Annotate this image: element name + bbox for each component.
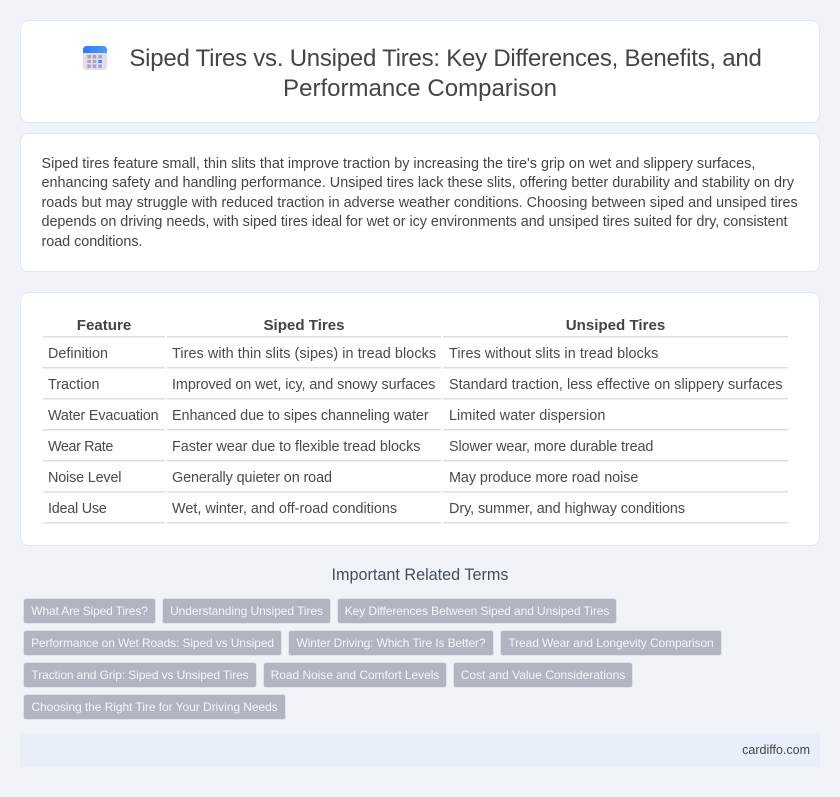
tag xyxy=(453,662,633,688)
tag: Performance on Wet Roads: Siped vs Unsiped xyxy=(31,636,274,650)
tag: Cost and Value Considerations xyxy=(461,668,625,682)
table header: Feature xyxy=(77,317,131,334)
tag list: related terms xyxy=(23,598,722,720)
row: definition: Definition xyxy=(48,346,108,362)
table header xyxy=(77,317,665,334)
tag xyxy=(288,630,494,656)
panel: title header xyxy=(20,20,820,123)
row: definition xyxy=(48,346,658,362)
row: traction: Traction xyxy=(48,377,99,393)
panel: introduction text xyxy=(20,133,820,272)
tag xyxy=(337,598,617,624)
row: wear rate: Faster wear due to flexible tread blocks xyxy=(172,439,420,455)
row: ideal use xyxy=(48,501,685,517)
tag: Choosing the Right Tire for Your Driving Needs xyxy=(31,700,278,714)
title xyxy=(129,45,762,102)
tag xyxy=(23,598,156,624)
panel: comparison table xyxy=(20,292,820,546)
row: traction xyxy=(48,377,783,393)
text block: summary: depends on driving needs, with siped tires ideal for wet or icy environments and unsiped tires suited for dry, consistent xyxy=(42,214,788,230)
tag xyxy=(23,630,282,656)
tag: Winter Driving: Which Tire Is Better? xyxy=(297,636,485,650)
row: wear rate: Wear Rate xyxy=(48,439,113,455)
tag: Traction and Grip: Siped vs Unsiped Tires xyxy=(31,668,249,682)
tag: Tread Wear and Longevity Comparison xyxy=(508,636,714,650)
row: water evacuation: Limited water dispersion xyxy=(449,408,605,424)
row: water evacuation: Enhanced due to sipes channeling water xyxy=(172,408,429,424)
tag xyxy=(23,694,286,720)
row: wear rate: Slower wear, more durable tread xyxy=(449,439,653,455)
row: noise level: Generally quieter on road xyxy=(172,470,332,486)
tag xyxy=(263,662,447,688)
text block: summary xyxy=(42,156,798,250)
tag xyxy=(162,598,331,624)
row: wear rate xyxy=(48,439,653,455)
row: definition: Tires without slits in tread blocks xyxy=(449,346,658,362)
heading: important related terms: Important Related Terms xyxy=(332,566,508,584)
row: water evacuation: Water Evacuation xyxy=(48,408,158,424)
row: ideal use: Dry, summer, and highway conditions xyxy=(449,501,685,517)
table header: Unsiped Tires xyxy=(566,317,665,334)
tag: Understanding Unsiped Tires xyxy=(170,604,323,618)
tag: What Are Siped Tires? xyxy=(31,604,148,618)
row: ideal use: Ideal Use xyxy=(48,501,107,517)
row: traction: Improved on wet, icy, and snowy surfaces xyxy=(172,377,435,393)
row: definition: Tires with thin slits (sipes) in tread blocks xyxy=(172,346,436,362)
tag: Key Differences Between Siped and Unsiped Tires xyxy=(345,604,609,618)
title: Performance Comparison xyxy=(283,75,557,102)
tag xyxy=(23,662,257,688)
tag xyxy=(500,630,722,656)
footer bar xyxy=(20,733,820,767)
icon: calendar xyxy=(83,46,107,70)
title: Siped Tires vs. Unsiped Tires: Key Differences, Benefits, and xyxy=(129,45,762,72)
text block: summary: roads but may struggle with reduced traction in adverse weather conditions. Choosing between siped and unsiped tires xyxy=(42,195,798,211)
row: traction: Standard traction, less effective on slippery surfaces xyxy=(449,377,783,393)
row: ideal use: Wet, winter, and off-road conditions xyxy=(172,501,397,517)
row: noise level xyxy=(48,470,638,486)
row: water evacuation xyxy=(48,408,605,424)
text block: summary: road conditions. xyxy=(42,234,142,250)
text block: summary: Siped tires feature small, thin slits that improve traction by increasing the tire's grip on wet and slippery surfaces, xyxy=(42,156,755,172)
table header: Siped Tires xyxy=(263,317,345,334)
row: noise level: May produce more road noise xyxy=(449,470,638,486)
footer source text: cardiffo.com xyxy=(742,743,810,757)
row: noise level: Noise Level xyxy=(48,470,121,486)
text block: summary: enhancing safety and handling performance. Unsiped tires lack these slits, offering better durability and stability on dry xyxy=(42,175,794,191)
tag: Road Noise and Comfort Levels xyxy=(271,668,439,682)
